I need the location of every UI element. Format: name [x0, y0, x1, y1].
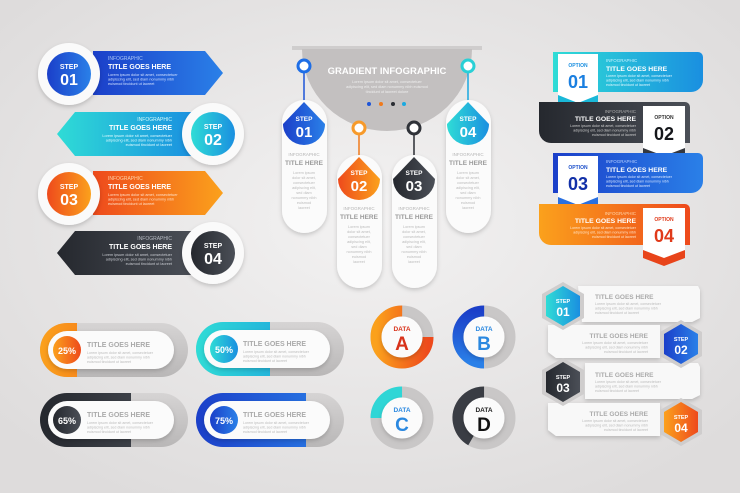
pin card 04: 04	[460, 124, 477, 141]
pill 65%: TITLE GOES HERE	[87, 412, 150, 419]
pin card 04: STEP	[460, 116, 477, 123]
pin card 04: INFOGRAPHIC	[452, 152, 484, 157]
step 03 banner: TITLE GOES HERE	[108, 184, 171, 191]
step 03 banner: 03	[60, 192, 78, 209]
pin card 01	[282, 60, 327, 233]
step 02 banner: TITLE GOES HERE	[109, 125, 172, 132]
option 04	[539, 204, 690, 266]
step 04 banner: INFOGRAPHIC	[137, 236, 172, 242]
hex step 02: STEP	[674, 337, 689, 343]
option 03: Lorem ipsum dolor sit amet, consectetuer	[606, 175, 673, 179]
option 02	[539, 102, 690, 164]
step 01 banner: STEP	[60, 64, 78, 71]
option 02: OPTION	[654, 115, 674, 121]
hex step 02: 02	[674, 343, 688, 357]
option 03: INFOGRAPHIC	[606, 159, 638, 164]
panel: step arrows left	[38, 43, 244, 284]
option 04: euismod tincidunt ut laoreet	[592, 235, 636, 239]
pin card 02: Lorem ipsum	[348, 225, 370, 229]
option 02: INFOGRAPHIC	[605, 109, 637, 114]
pill 25%: adipiscing elit, sed diam nonummy nibh	[87, 356, 150, 360]
hex step 02: TITLE GOES HERE	[589, 333, 649, 340]
pin card 01: Lorem ipsum	[293, 171, 315, 175]
hex step 02: adipiscing elit, sed diam nonummy nibh	[585, 346, 648, 350]
option 03: OPTION	[568, 165, 588, 171]
pill 65%: 65%	[58, 416, 76, 426]
pin card 02: laoreet	[353, 260, 366, 264]
pin card 04: Lorem ipsum	[457, 171, 479, 175]
pill 25%: TITLE GOES HERE	[87, 342, 150, 349]
step 04 banner: STEP	[204, 243, 222, 250]
pill 65%: euismod tincidunt ut laoreet	[87, 430, 131, 434]
pin card 01: INFOGRAPHIC	[288, 152, 320, 157]
donut A	[376, 311, 428, 363]
pin card 03	[392, 122, 437, 288]
ribbon bands	[548, 286, 700, 436]
pin card 03: dolor sit amet,	[402, 230, 426, 234]
hex step 03: STEP	[556, 375, 571, 381]
pin card 01: sed diam	[296, 191, 312, 195]
pin card 03: consectetuer	[403, 235, 426, 239]
hex step 04: STEP	[674, 415, 689, 421]
option 03: 03	[568, 174, 588, 194]
step 01 banner: adipiscing elit, sed diam nonummy nibh	[108, 78, 174, 82]
pin card 01: TITLE HERE	[285, 160, 324, 167]
pin card 02: STEP	[351, 170, 368, 177]
option 01: adipiscing elit, sed diam nonummy nibh	[606, 78, 669, 82]
hex step 02: euismod tincidunt ut laoreet	[604, 350, 648, 354]
hex step 04: euismod tincidunt ut laoreet	[604, 428, 648, 432]
option 01	[553, 52, 703, 112]
pin card 01: consectetuer	[293, 181, 316, 185]
pin card 02: euismod	[352, 255, 366, 259]
header semicircle: GRADIENT INFOGRAPHIC	[328, 66, 447, 77]
step 01 banner: 01	[60, 72, 78, 89]
step 03 banner: INFOGRAPHIC	[108, 176, 143, 182]
step 04 banner: euismod tincidunt ut laoreet	[126, 262, 173, 266]
step 02 banner: Lorem ipsum dolor sit amet, consectetuer	[102, 134, 173, 138]
header semicircle: tincidunt ut laoreet dolore	[366, 90, 408, 94]
pill 75%: TITLE GOES HERE	[243, 412, 306, 419]
header semicircle	[292, 46, 482, 131]
option 01: TITLE GOES HERE	[606, 66, 668, 73]
pill 75%: Lorem ipsum dolor sit amet, consectetuer	[243, 421, 310, 425]
pill 50%: TITLE GOES HERE	[243, 341, 306, 348]
option 03: adipiscing elit, sed diam nonummy nibh	[606, 180, 669, 184]
donut A: DATA	[393, 326, 411, 333]
step 04 banner	[57, 222, 244, 284]
hex step 02	[582, 320, 702, 368]
step 01 banner: INFOGRAPHIC	[108, 56, 143, 62]
pin card 03: INFOGRAPHIC	[398, 206, 430, 211]
option 04: 04	[654, 226, 674, 246]
donut D	[448, 382, 520, 454]
option 03	[553, 153, 703, 213]
pin card 03: euismod	[407, 255, 421, 259]
donut B: B	[477, 334, 491, 355]
panel: data donuts	[376, 311, 520, 454]
hex step 01: 01	[556, 305, 570, 319]
pill 75%: adipiscing elit, sed diam nonummy nibh	[243, 426, 306, 430]
option 02: euismod tincidunt ut laoreet	[592, 133, 636, 137]
hex step 01: TITLE GOES HERE	[595, 294, 654, 301]
pin card 02: TITLE HERE	[340, 214, 379, 221]
panel: options right	[539, 52, 703, 266]
hex step 04: Lorem ipsum dolor sit amet, consectetuer	[582, 419, 649, 423]
pin card 01: STEP	[296, 116, 313, 123]
hex step 03: TITLE GOES HERE	[595, 372, 654, 379]
pin card 03: nonummy nibh	[402, 250, 426, 254]
pin card 03: sed diam	[406, 245, 422, 249]
pin card 04: TITLE HERE	[449, 160, 488, 167]
pin card 04	[446, 60, 491, 233]
step 02 banner	[57, 103, 244, 165]
hex step 01: STEP	[556, 299, 571, 305]
hex step 03: euismod tincidunt ut laoreet	[595, 389, 639, 393]
donut C	[376, 392, 428, 444]
hex step 02: Lorem ipsum dolor sit amet, consectetuer	[582, 341, 649, 345]
hex step 03: 03	[556, 381, 570, 395]
pin card 03: Lorem ipsum	[403, 225, 425, 229]
option 04: INFOGRAPHIC	[605, 211, 637, 216]
panel: gradient infographic pins	[282, 46, 491, 288]
option 01: 01	[568, 72, 588, 92]
pin card 02: adipiscing elit,	[347, 240, 371, 244]
donut A: A	[395, 334, 409, 355]
pin card 03: adipiscing elit,	[402, 240, 426, 244]
step 02 banner: INFOGRAPHIC	[137, 117, 172, 123]
hex step 04: adipiscing elit, sed diam nonummy nibh	[585, 424, 648, 428]
pill 65%: adipiscing elit, sed diam nonummy nibh	[87, 426, 150, 430]
option 03: TITLE GOES HERE	[606, 167, 668, 174]
pin card 03: 03	[406, 178, 422, 195]
step 03 banner: STEP	[60, 184, 78, 191]
header semicircle: Lorem ipsum dolor sit amet, consectetuer	[352, 80, 423, 84]
step 03 banner: adipiscing elit, sed diam nonummy nibh	[108, 198, 174, 202]
step 03 banner: Lorem ipsum dolor sit amet, consectetuer	[108, 193, 178, 197]
pin card 02: sed diam	[351, 245, 367, 249]
pin card 01: euismod	[297, 201, 311, 205]
pin card 04: nonummy nibh	[456, 196, 480, 200]
pin card 02: dolor sit amet,	[347, 230, 371, 234]
step 02 banner: 02	[204, 132, 222, 149]
pin card 03: laoreet	[408, 260, 421, 264]
pin card 01: dolor sit amet,	[292, 176, 316, 180]
pin card 01: laoreet	[298, 206, 311, 210]
donut C: C	[395, 415, 409, 436]
step 04 banner: 04	[204, 251, 222, 268]
hex step 04: 04	[674, 421, 688, 435]
hex step 03	[542, 358, 662, 406]
pin card 02: INFOGRAPHIC	[343, 206, 375, 211]
option 04: OPTION	[654, 217, 674, 223]
panel: percentage pills	[40, 322, 344, 447]
step 04 banner: Lorem ipsum dolor sit amet, consectetuer	[102, 253, 173, 257]
option 01: INFOGRAPHIC	[606, 58, 638, 63]
step 01 banner: Lorem ipsum dolor sit amet, consectetuer	[108, 73, 178, 77]
pin card 04: adipiscing elit,	[456, 186, 480, 190]
hex step 03: adipiscing elit, sed diam nonummy nibh	[595, 384, 658, 388]
pin card 01: nonummy nibh	[292, 196, 316, 200]
pill 25%: 25%	[58, 346, 76, 356]
step 01 banner	[38, 43, 223, 105]
option 01: euismod tincidunt ut laoreet	[606, 83, 650, 87]
header semicircle: adipiscing elit, sed diam nonummy nibh euismod	[346, 85, 428, 89]
option 02: Lorem ipsum dolor sit amet, consectetuer	[570, 124, 637, 128]
option 01: Lorem ipsum dolor sit amet, consectetuer	[606, 74, 673, 78]
step 02 banner: adipiscing elit, sed diam nonummy nibh	[106, 138, 172, 142]
hex step 01: adipiscing elit, sed diam nonummy nibh	[595, 306, 658, 310]
pill 50%: Lorem ipsum dolor sit amet, consectetuer	[243, 350, 310, 354]
option 02: 02	[654, 124, 674, 144]
pill 50%: adipiscing elit, sed diam nonummy nibh	[243, 354, 306, 358]
pin card 01: 01	[296, 124, 312, 141]
pin card 01: adipiscing elit,	[292, 186, 316, 190]
pill 50%: 50%	[215, 345, 233, 355]
hex step 01: euismod tincidunt ut laoreet	[595, 311, 639, 315]
hex step 04: TITLE GOES HERE	[589, 411, 649, 418]
pill 25%: Lorem ipsum dolor sit amet, consectetuer	[87, 351, 154, 355]
pill 25%	[40, 323, 188, 377]
pin card 02: 02	[351, 178, 367, 195]
pill 65%: Lorem ipsum dolor sit amet, consectetuer	[87, 421, 154, 425]
pin card 04: consectetuer	[457, 181, 480, 185]
option 04: adipiscing elit, sed diam nonummy nibh	[573, 230, 636, 234]
pill 65%	[40, 393, 188, 447]
hex step 04	[582, 398, 702, 446]
pin card 04: sed diam	[460, 191, 476, 195]
step 04 banner: adipiscing elit, sed diam nonummy nibh	[106, 258, 172, 262]
step 02 banner: STEP	[204, 124, 222, 131]
pin card 03: STEP	[406, 170, 423, 177]
step 01 banner: TITLE GOES HERE	[108, 64, 171, 71]
step 01 banner: euismod tincidunt ut laoreet	[108, 82, 155, 86]
panel: hexagon steps	[542, 282, 702, 446]
step 03 banner: euismod tincidunt ut laoreet	[108, 202, 155, 206]
option 04: TITLE GOES HERE	[575, 218, 636, 225]
pin card 02	[337, 122, 382, 288]
pill 75%	[196, 393, 344, 447]
option 03: euismod tincidunt ut laoreet	[606, 184, 650, 188]
pin card 04: euismod	[461, 201, 475, 205]
option 02: TITLE GOES HERE	[575, 116, 636, 123]
pin card 04: dolor sit amet,	[456, 176, 480, 180]
pin card 04: laoreet	[462, 206, 475, 210]
step 02 banner: euismod tincidunt ut laoreet	[126, 143, 173, 147]
donut D: D	[477, 415, 491, 436]
option 02: adipiscing elit, sed diam nonummy nibh	[573, 128, 636, 132]
option 01: OPTION	[568, 63, 588, 69]
pill 75%: euismod tincidunt ut laoreet	[243, 430, 287, 434]
step 03 banner	[38, 163, 223, 225]
donut B	[458, 311, 510, 363]
pill 25%: euismod tincidunt ut laoreet	[87, 360, 131, 364]
pill 75%: 75%	[215, 416, 233, 426]
donut B: DATA	[475, 326, 493, 333]
donut C: DATA	[393, 407, 411, 414]
hex step 01: Lorem ipsum dolor sit amet, consectetuer	[595, 302, 662, 306]
donut D: DATA	[475, 407, 493, 414]
option 04: Lorem ipsum dolor sit amet, consectetuer	[570, 226, 637, 230]
pill 50%: euismod tincidunt ut laoreet	[243, 359, 287, 363]
pin card 02: nonummy nibh	[347, 250, 371, 254]
pin card 03: TITLE HERE	[395, 214, 434, 221]
pin card 02: consectetuer	[348, 235, 371, 239]
step 04 banner: TITLE GOES HERE	[109, 244, 172, 251]
pill 50%	[196, 322, 344, 376]
hex step 01	[542, 282, 662, 330]
hex step 03: Lorem ipsum dolor sit amet, consectetuer	[595, 380, 662, 384]
